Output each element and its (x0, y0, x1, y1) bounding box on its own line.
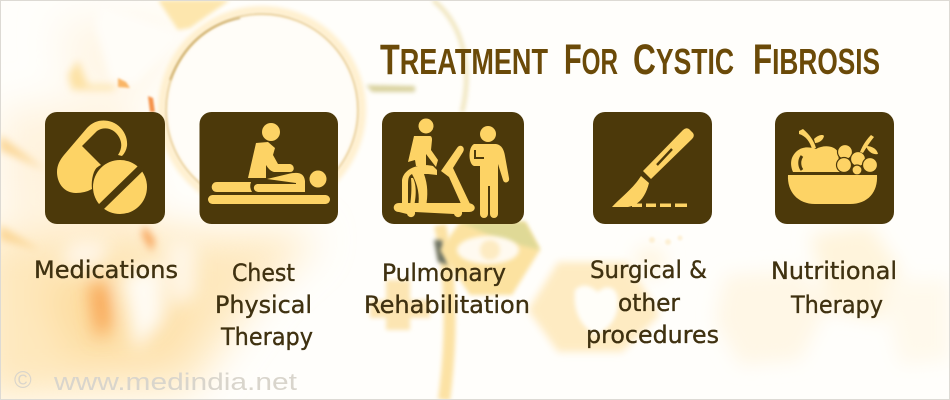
label: chest physical therapy: Chest (232, 259, 295, 287)
title: TREATMENT (380, 36, 548, 84)
stethoscope tube (433, 0, 466, 112)
label: pulmonary rehabilitation: Rehabilitation (364, 291, 530, 319)
title: FIBROSIS (753, 36, 880, 84)
stethoscope ring (162, 10, 362, 210)
panel: surgical procedures icon (593, 112, 712, 224)
medical hexagons (440, 222, 540, 295)
label: nutritional therapy: Nutritional (771, 257, 897, 285)
label: medications: Medications (34, 256, 178, 284)
label: chest physical therapy: Therapy (220, 323, 313, 351)
panel: nutritional therapy icon (775, 112, 894, 224)
watermark (14, 367, 297, 396)
label: surgical and other procedures (586, 256, 719, 349)
label: surgical and other procedures: Surgical & (590, 256, 707, 284)
label: nutritional therapy (771, 257, 897, 319)
label: nutritional therapy: Therapy (790, 291, 883, 319)
label: surgical and other procedures: other (618, 289, 680, 317)
label: surgical and other procedures: procedures (586, 321, 719, 349)
title (380, 36, 880, 84)
label: chest physical therapy (215, 259, 313, 351)
top wedge (158, 0, 230, 30)
panel: chest physical therapy icon (200, 112, 338, 224)
title: CYSTIC (633, 36, 734, 84)
watermark: © (14, 367, 32, 394)
label: pulmonary rehabilitation (364, 259, 530, 319)
title: FOR (564, 36, 618, 84)
watermark: www.medindia.net (53, 369, 297, 396)
label: pulmonary rehabilitation: Pulmonary (382, 259, 506, 287)
panel: pulmonary rehabilitation icon (382, 112, 524, 224)
panel: medications icon (45, 112, 165, 224)
label: chest physical therapy: Physical (215, 291, 312, 319)
